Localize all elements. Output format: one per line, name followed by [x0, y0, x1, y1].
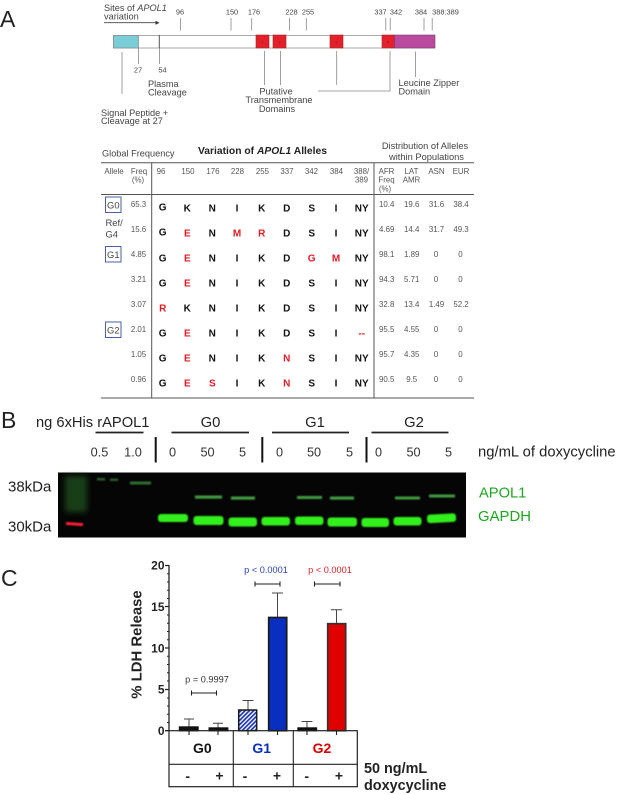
residue rows: I — [335, 204, 338, 214]
allele labels: Ref/ — [106, 217, 123, 228]
residue rows: I — [335, 228, 338, 240]
column headers: LAT — [405, 167, 419, 176]
protein bar — [114, 35, 435, 48]
group table under axis — [169, 731, 357, 787]
domain annotations: Domain — [398, 86, 430, 96]
panel B: western blot labels: 5 — [445, 446, 452, 460]
residue rows: NY — [355, 354, 369, 364]
population distribution values: 95.5 — [379, 325, 395, 334]
column headers: 389 — [355, 176, 369, 185]
residue rows: I — [236, 254, 239, 264]
variation site ticks and numbers: 228 — [285, 8, 298, 16]
population distribution values: 49.3 — [453, 225, 469, 234]
group table under axis: + — [273, 768, 281, 784]
domain annotations: Signal Peptide + — [101, 108, 168, 118]
y axis title: % LDH Release — [130, 590, 146, 699]
variation site ticks and numbers — [176, 8, 459, 30]
allele labels: G4 — [106, 229, 118, 240]
global frequency values: 65.3 — [131, 200, 147, 209]
global frequency values: 15.6 — [131, 225, 147, 234]
table grid lines — [101, 163, 474, 398]
column headers: AFR — [379, 167, 395, 176]
y axis: 0 — [158, 724, 165, 738]
column headers: 228 — [231, 167, 245, 176]
column headers: (%) — [379, 184, 392, 194]
variation site ticks and numbers: 150 — [226, 8, 238, 16]
residue rows: G — [159, 378, 167, 390]
residue rows: I — [335, 354, 338, 364]
panel A: allele variation table — [101, 141, 474, 398]
population distribution values: 0 — [434, 250, 439, 259]
domain annotations: Leucine Zipper — [398, 78, 459, 88]
global frequency values: 3.21 — [131, 275, 146, 284]
column headers: 384 — [330, 167, 344, 176]
residue rows: -- — [358, 328, 365, 340]
residue rows: G — [159, 228, 167, 238]
population distribution values: 0 — [434, 375, 439, 384]
panel B: western blot labels: ng 6xHis rAPOL1 — [36, 415, 149, 431]
panel B: western blot labels: 0 — [169, 446, 176, 460]
residue rows: I — [335, 328, 338, 340]
column headers: Allele — [104, 167, 124, 176]
column headers: Freq — [131, 167, 147, 176]
population distribution values: 95.7 — [379, 350, 394, 359]
residue rows: S — [308, 328, 315, 340]
global frequency values: 4.85 — [131, 250, 147, 259]
population distribution values — [379, 200, 469, 384]
group table under axis: + — [215, 768, 224, 784]
residue rows: I — [335, 378, 338, 390]
y axis: 5 — [158, 682, 165, 696]
residue rows: NY — [355, 254, 369, 264]
population distribution values: 4.35 — [404, 350, 420, 359]
residue rows: N — [209, 204, 216, 214]
panel B: western blot labels: 50 — [200, 446, 215, 460]
doxycycline condition label — [364, 761, 446, 794]
allele labels: G2 — [107, 324, 120, 336]
residue rows: M — [233, 228, 241, 240]
residue rows: D — [283, 304, 290, 314]
column headers: (%) — [132, 176, 145, 185]
protein bar: 4 — [387, 40, 390, 44]
p value annotations: p < 0.0001 — [308, 565, 352, 575]
group table under axis: + — [335, 768, 343, 784]
population distribution values: 0 — [434, 275, 439, 284]
domain annotations: Cleavage at 27 — [101, 116, 163, 126]
column headers — [104, 167, 470, 194]
group table under axis: G2 — [313, 740, 332, 756]
column headers: AMR — [403, 176, 421, 185]
allele labels: G0 — [107, 200, 120, 211]
column headers: EUR — [453, 167, 470, 176]
residue rows: N — [209, 354, 216, 364]
population distribution values: 0 — [434, 325, 439, 334]
population distribution values: 10.4 — [379, 200, 395, 209]
column headers: ASN — [428, 167, 445, 176]
population distribution values: 4.55 — [404, 325, 420, 334]
residue rows: I — [236, 354, 239, 364]
residue rows: D — [283, 228, 290, 240]
population distribution values: 32.8 — [379, 300, 395, 309]
group table under axis: - — [304, 768, 309, 784]
population distribution values: 1.49 — [429, 300, 445, 309]
panel B: western blot labels: APOL1 — [479, 486, 526, 502]
residue rows: N — [283, 378, 290, 390]
panel B: western blot labels — [8, 415, 616, 536]
residue rows: K — [258, 204, 266, 214]
allele labels — [106, 197, 123, 338]
panel B label: B — [1, 407, 16, 433]
p value annotations — [185, 565, 352, 696]
panel C label: C — [1, 565, 18, 591]
residue rows: M — [332, 254, 340, 264]
residue rows: R — [159, 304, 167, 314]
population distribution values: 4.69 — [379, 225, 395, 234]
domain annotations: Domains — [259, 104, 296, 114]
y axis — [151, 558, 169, 738]
population distribution values: 0 — [434, 350, 439, 359]
protein bar: 2 — [278, 40, 281, 44]
residue rows: NY — [355, 278, 369, 290]
residue rows: E — [184, 328, 191, 340]
residue rows: I — [236, 278, 239, 290]
domain annotations: Putative — [259, 86, 293, 96]
residue rows: R — [258, 228, 266, 240]
residue rows: K — [258, 328, 266, 340]
population distribution values: 52.2 — [453, 300, 469, 309]
residue rows: E — [184, 378, 191, 390]
residue rows: E — [184, 354, 191, 364]
western blot image — [58, 472, 466, 538]
panel B: western blot labels: 0.5 — [91, 446, 108, 460]
residue rows: I — [236, 378, 239, 390]
domain annotations: Cleavage — [148, 88, 187, 98]
sites of variation caption with arrow: Sites of APOL1 — [104, 3, 167, 13]
panel B: western blot labels: 30kDa — [8, 519, 52, 536]
residue rows: K — [184, 204, 192, 214]
residue rows: E — [184, 228, 191, 240]
column headers: 176 — [206, 167, 220, 176]
residue rows: D — [283, 204, 290, 214]
group table under axis: G1 — [252, 740, 271, 756]
domain annotations: 54 — [158, 66, 167, 74]
residue rows: N — [209, 278, 216, 290]
panel B: western blot labels: G1 — [305, 415, 325, 431]
residue rows: D — [283, 278, 290, 290]
variation site ticks and numbers: 342 — [390, 8, 402, 16]
residue rows: NY — [355, 204, 369, 214]
error bars — [184, 593, 342, 730]
population distribution values: 13.4 — [404, 300, 420, 309]
residue rows: S — [308, 378, 315, 390]
population distribution values: 31.6 — [429, 200, 445, 209]
variation site ticks and numbers: 96 — [176, 8, 184, 16]
panel A label: A — [0, 6, 16, 32]
y axis: 15 — [151, 600, 165, 614]
population distribution values: 9.5 — [406, 375, 418, 384]
panel B: western blot labels: ng/mL of doxycycline — [478, 444, 616, 460]
domain annotations: Plasma — [148, 79, 180, 89]
population distribution values: 5.71 — [404, 275, 419, 284]
residue rows: K — [258, 378, 266, 390]
panel B: western blot labels: G2 — [404, 415, 424, 431]
population distribution values: 19.6 — [404, 200, 420, 209]
residue rows: D — [283, 328, 290, 340]
column headers: Freq — [378, 176, 395, 185]
residue rows: NY — [355, 228, 369, 240]
variation site ticks and numbers: 255 — [302, 8, 314, 16]
global frequency values: 3.07 — [131, 300, 146, 309]
population distribution values: 1.89 — [404, 250, 420, 259]
variation site ticks and numbers: 337 — [374, 8, 387, 16]
table headings: within Populations — [388, 152, 464, 162]
domain annotations: 27 — [134, 66, 142, 74]
residue rows: G — [159, 202, 167, 214]
residue rows: G — [308, 254, 316, 264]
protein bar: 3 — [335, 40, 338, 44]
residue rows: K — [258, 304, 266, 314]
population distribution values: 14.4 — [404, 225, 420, 234]
variation site ticks and numbers: 176 — [248, 8, 260, 16]
residue rows: D — [283, 254, 290, 264]
residue rows: K — [258, 254, 266, 264]
residue rows: I — [335, 278, 338, 290]
residue rows: N — [209, 328, 216, 340]
population distribution values: 0 — [458, 250, 463, 259]
group table under axis: - — [243, 768, 248, 784]
residue rows: G — [159, 278, 167, 290]
column headers: 255 — [256, 167, 270, 176]
population distribution values: 0 — [458, 275, 463, 284]
population distribution values: 38.4 — [453, 200, 469, 209]
residue rows: K — [258, 278, 266, 290]
population distribution values: 90.5 — [379, 375, 395, 384]
residue rows: I — [236, 304, 239, 314]
column headers: 96 — [157, 167, 166, 176]
residue rows: I — [236, 328, 239, 340]
p value annotations: p < 0.0001 — [244, 565, 288, 575]
column headers: 388/ — [354, 167, 370, 176]
panel B: western blot labels: 38kDa — [8, 479, 52, 496]
residue rows: K — [184, 304, 192, 314]
group table under axis: G0 — [193, 740, 212, 756]
sites of variation caption with arrow: variation — [104, 12, 139, 22]
column headers: 150 — [181, 167, 195, 176]
doxycycline condition label: doxycycline — [364, 778, 446, 794]
variation site ticks and numbers: 384 — [415, 8, 427, 16]
column headers: 337 — [280, 167, 294, 176]
residue rows: G — [159, 254, 167, 264]
panel C: LDH release bar chart — [130, 558, 446, 794]
population distribution values: 31.7 — [429, 225, 444, 234]
table headings: Distribution of Alleles — [382, 141, 468, 151]
panel B: western blot labels: GAPDH — [478, 509, 531, 525]
table headings: Global Frequency — [102, 149, 175, 159]
population distribution values: 0 — [458, 350, 463, 359]
residue rows: S — [308, 204, 315, 214]
table headings: Variation of APOL1 Alleles — [198, 146, 327, 157]
y axis: 20 — [151, 558, 165, 572]
sites of variation caption with arrow — [104, 3, 167, 25]
global frequency values: 2.01 — [131, 325, 146, 334]
allele labels: G1 — [107, 249, 120, 260]
residue rows: G — [159, 328, 167, 340]
population distribution values: 0 — [458, 375, 463, 384]
domain annotations: Transmembrane — [245, 95, 313, 105]
residue rows: E — [184, 254, 191, 264]
residue rows: S — [209, 378, 216, 390]
protein bar: 1 — [261, 40, 264, 44]
p value annotations: p = 0.9997 — [185, 674, 229, 684]
residue rows: S — [308, 354, 315, 364]
global frequency values: 1.05 — [131, 350, 147, 359]
panel B: western blot labels: 1.0 — [124, 446, 142, 460]
global frequency values: 0.96 — [131, 375, 147, 384]
table headings — [102, 141, 468, 162]
residue rows: I — [335, 304, 338, 314]
residue rows: E — [184, 278, 191, 290]
residue rows: N — [209, 228, 216, 240]
population distribution values: 94.3 — [379, 275, 395, 284]
global frequency values — [131, 200, 147, 384]
population distribution values: 0 — [458, 325, 463, 334]
panel B: western blot labels: G0 — [201, 415, 220, 431]
residue rows: S — [308, 304, 315, 314]
residue rows: N — [209, 254, 216, 264]
residue rows: I — [236, 204, 239, 214]
residue rows: N — [283, 354, 290, 364]
residue rows: NY — [355, 378, 369, 390]
panel A: APOL1 protein domain diagram — [101, 3, 459, 126]
panel B: western blot labels: 50 — [406, 446, 421, 460]
residue rows: S — [308, 278, 315, 290]
panel B: western blot labels: 5 — [239, 446, 246, 460]
residue rows: N — [209, 304, 216, 314]
bars — [180, 618, 346, 731]
variation site ticks and numbers: 388:389 — [432, 8, 459, 16]
residue rows: G — [159, 354, 167, 364]
column headers: 342 — [305, 167, 318, 176]
group table under axis: - — [185, 768, 190, 784]
domain annotations — [101, 48, 459, 126]
panel B: western blot labels: 50 — [307, 446, 321, 460]
y axis: 10 — [151, 642, 165, 656]
residue rows: S — [308, 228, 315, 240]
residue rows: NY — [355, 304, 369, 314]
panel B: western blot labels: 0 — [375, 446, 382, 460]
panel B: western blot labels: 5 — [346, 446, 353, 460]
doxycycline condition label: 50 ng/mL — [364, 761, 427, 777]
residue rows — [159, 202, 369, 390]
residue rows: K — [258, 354, 266, 364]
panel B: western blot labels: 0 — [276, 446, 283, 460]
population distribution values: 98.1 — [379, 250, 394, 259]
